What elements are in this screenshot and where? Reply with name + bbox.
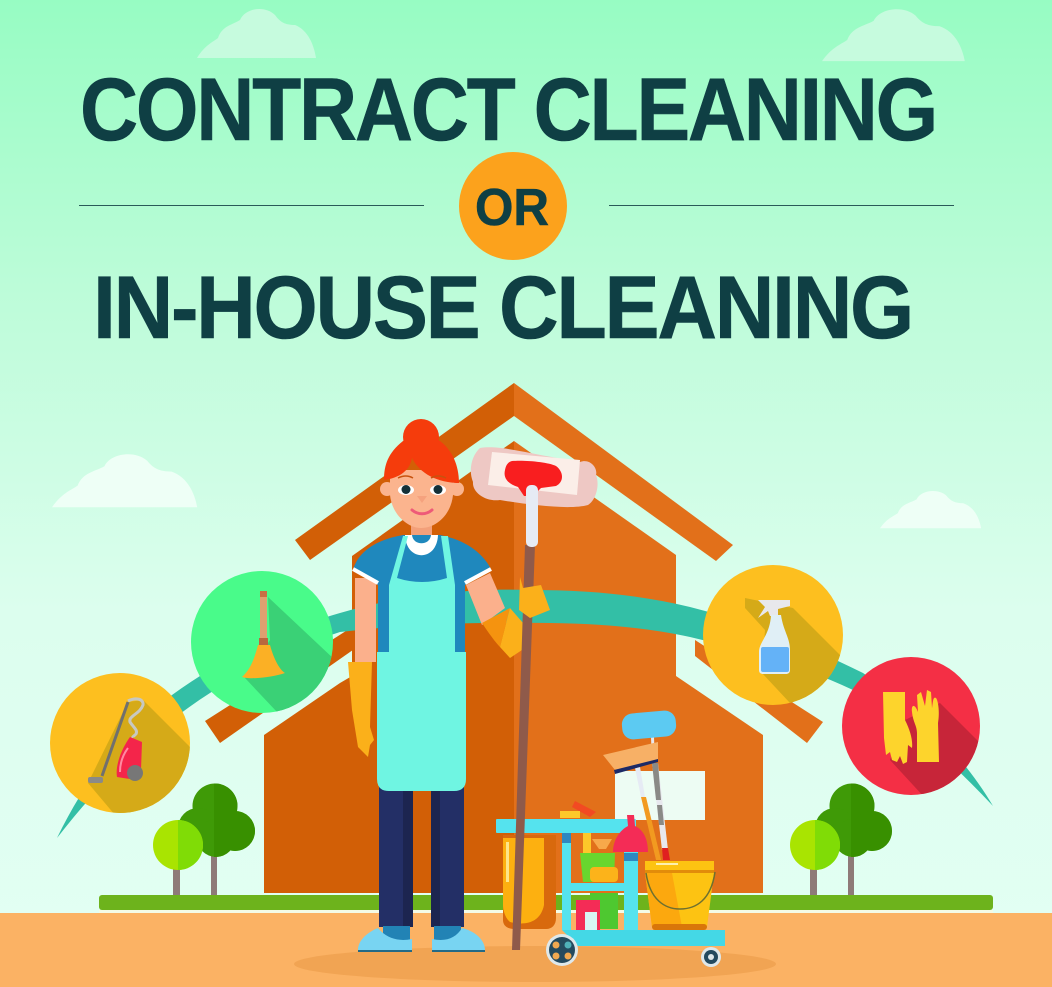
glove left [883,692,912,764]
blue sponge mop [621,710,677,740]
clouds [52,9,981,528]
long handled tools [635,737,670,860]
head [380,419,464,528]
broom handle [260,592,267,642]
trunk small [810,866,817,895]
shirt sleeve trim left [353,569,378,583]
broom bristles [242,645,285,678]
mouth [412,510,432,514]
glove hand [519,577,550,618]
sponge [590,867,618,882]
divider right [609,205,954,206]
person [348,419,523,952]
title line: in-house cleaning: IN-HOUSE CLEANING [93,257,912,357]
mop plate [488,452,580,495]
neck [411,515,432,545]
crown small shade [178,820,203,870]
face [390,470,453,528]
yellow detergent stick [583,833,591,853]
cloud: top left [197,9,316,58]
cart posts [562,833,571,930]
crown large [178,784,255,857]
dust brush [572,801,596,817]
title [79,59,954,357]
nose [417,496,427,503]
shoes [358,926,485,952]
mop clamp [505,461,562,496]
or badge: OR [475,179,549,237]
lower roof [205,622,360,743]
red bottle box [576,900,600,930]
tree pair: right [790,784,892,895]
arc connecting icons [57,590,993,838]
collar [405,535,438,555]
cloud: middle right [880,491,981,528]
broom [603,742,658,774]
eyes [398,485,414,495]
left arm [355,578,376,662]
house [205,383,823,893]
crown small [153,820,203,870]
legs [379,785,464,927]
liquid [761,647,789,672]
ears [380,482,394,496]
apron [377,536,466,791]
trees [153,784,892,895]
cloud: top right [822,9,965,61]
window [615,771,705,820]
cloud: middle left [52,454,197,507]
crown small shade [815,820,840,870]
icon: spray bottle [703,565,845,705]
trunk small [173,866,180,895]
right arm [466,573,505,625]
long shadow [745,598,845,705]
long shadow [890,703,978,794]
cart middle shelf [568,883,628,891]
icon: vacuum cleaner [50,673,195,820]
brows [398,476,446,478]
bucket [645,861,715,930]
bottle [759,615,790,674]
vacuum body [117,737,142,779]
cart bottom shelf [562,930,725,946]
mop pad [471,447,598,507]
long shadow [88,700,190,813]
green box [590,893,618,929]
long shadow [245,597,335,715]
icon: broom [191,571,335,715]
crown small [790,820,840,870]
crown large [815,784,892,857]
cart top shelf [496,819,636,833]
tree pair: left [153,784,255,895]
green bin [580,853,615,882]
cleaning cart [496,710,725,967]
right glove [482,608,523,658]
ground shadow [294,946,776,982]
icon: rubber gloves [842,657,985,800]
trunk large [211,852,217,895]
divider left [79,205,424,206]
left glove [348,662,374,757]
shirt sleeve trim right [465,569,491,583]
vacuum hose [128,699,143,738]
wheels [546,934,721,967]
vacuum wand [102,702,128,776]
glove right [912,690,939,762]
mop [471,447,598,950]
lower house [264,676,514,893]
upper house [352,441,514,700]
hair bun [403,419,439,455]
small funnel [592,839,612,849]
dustpan [613,815,648,852]
sprayer head [758,600,790,618]
crown shade [214,784,255,857]
hair [384,437,459,483]
trunk large [848,852,854,895]
title line: contract cleaning: CONTRACT CLEANING [80,59,936,159]
ground [0,913,1052,987]
shirt [353,535,491,652]
crown shade [851,784,892,857]
upper roof [295,383,514,560]
mop handle [512,545,535,950]
trash bag [503,835,556,929]
or badge [459,152,567,260]
hedge [99,895,993,913]
